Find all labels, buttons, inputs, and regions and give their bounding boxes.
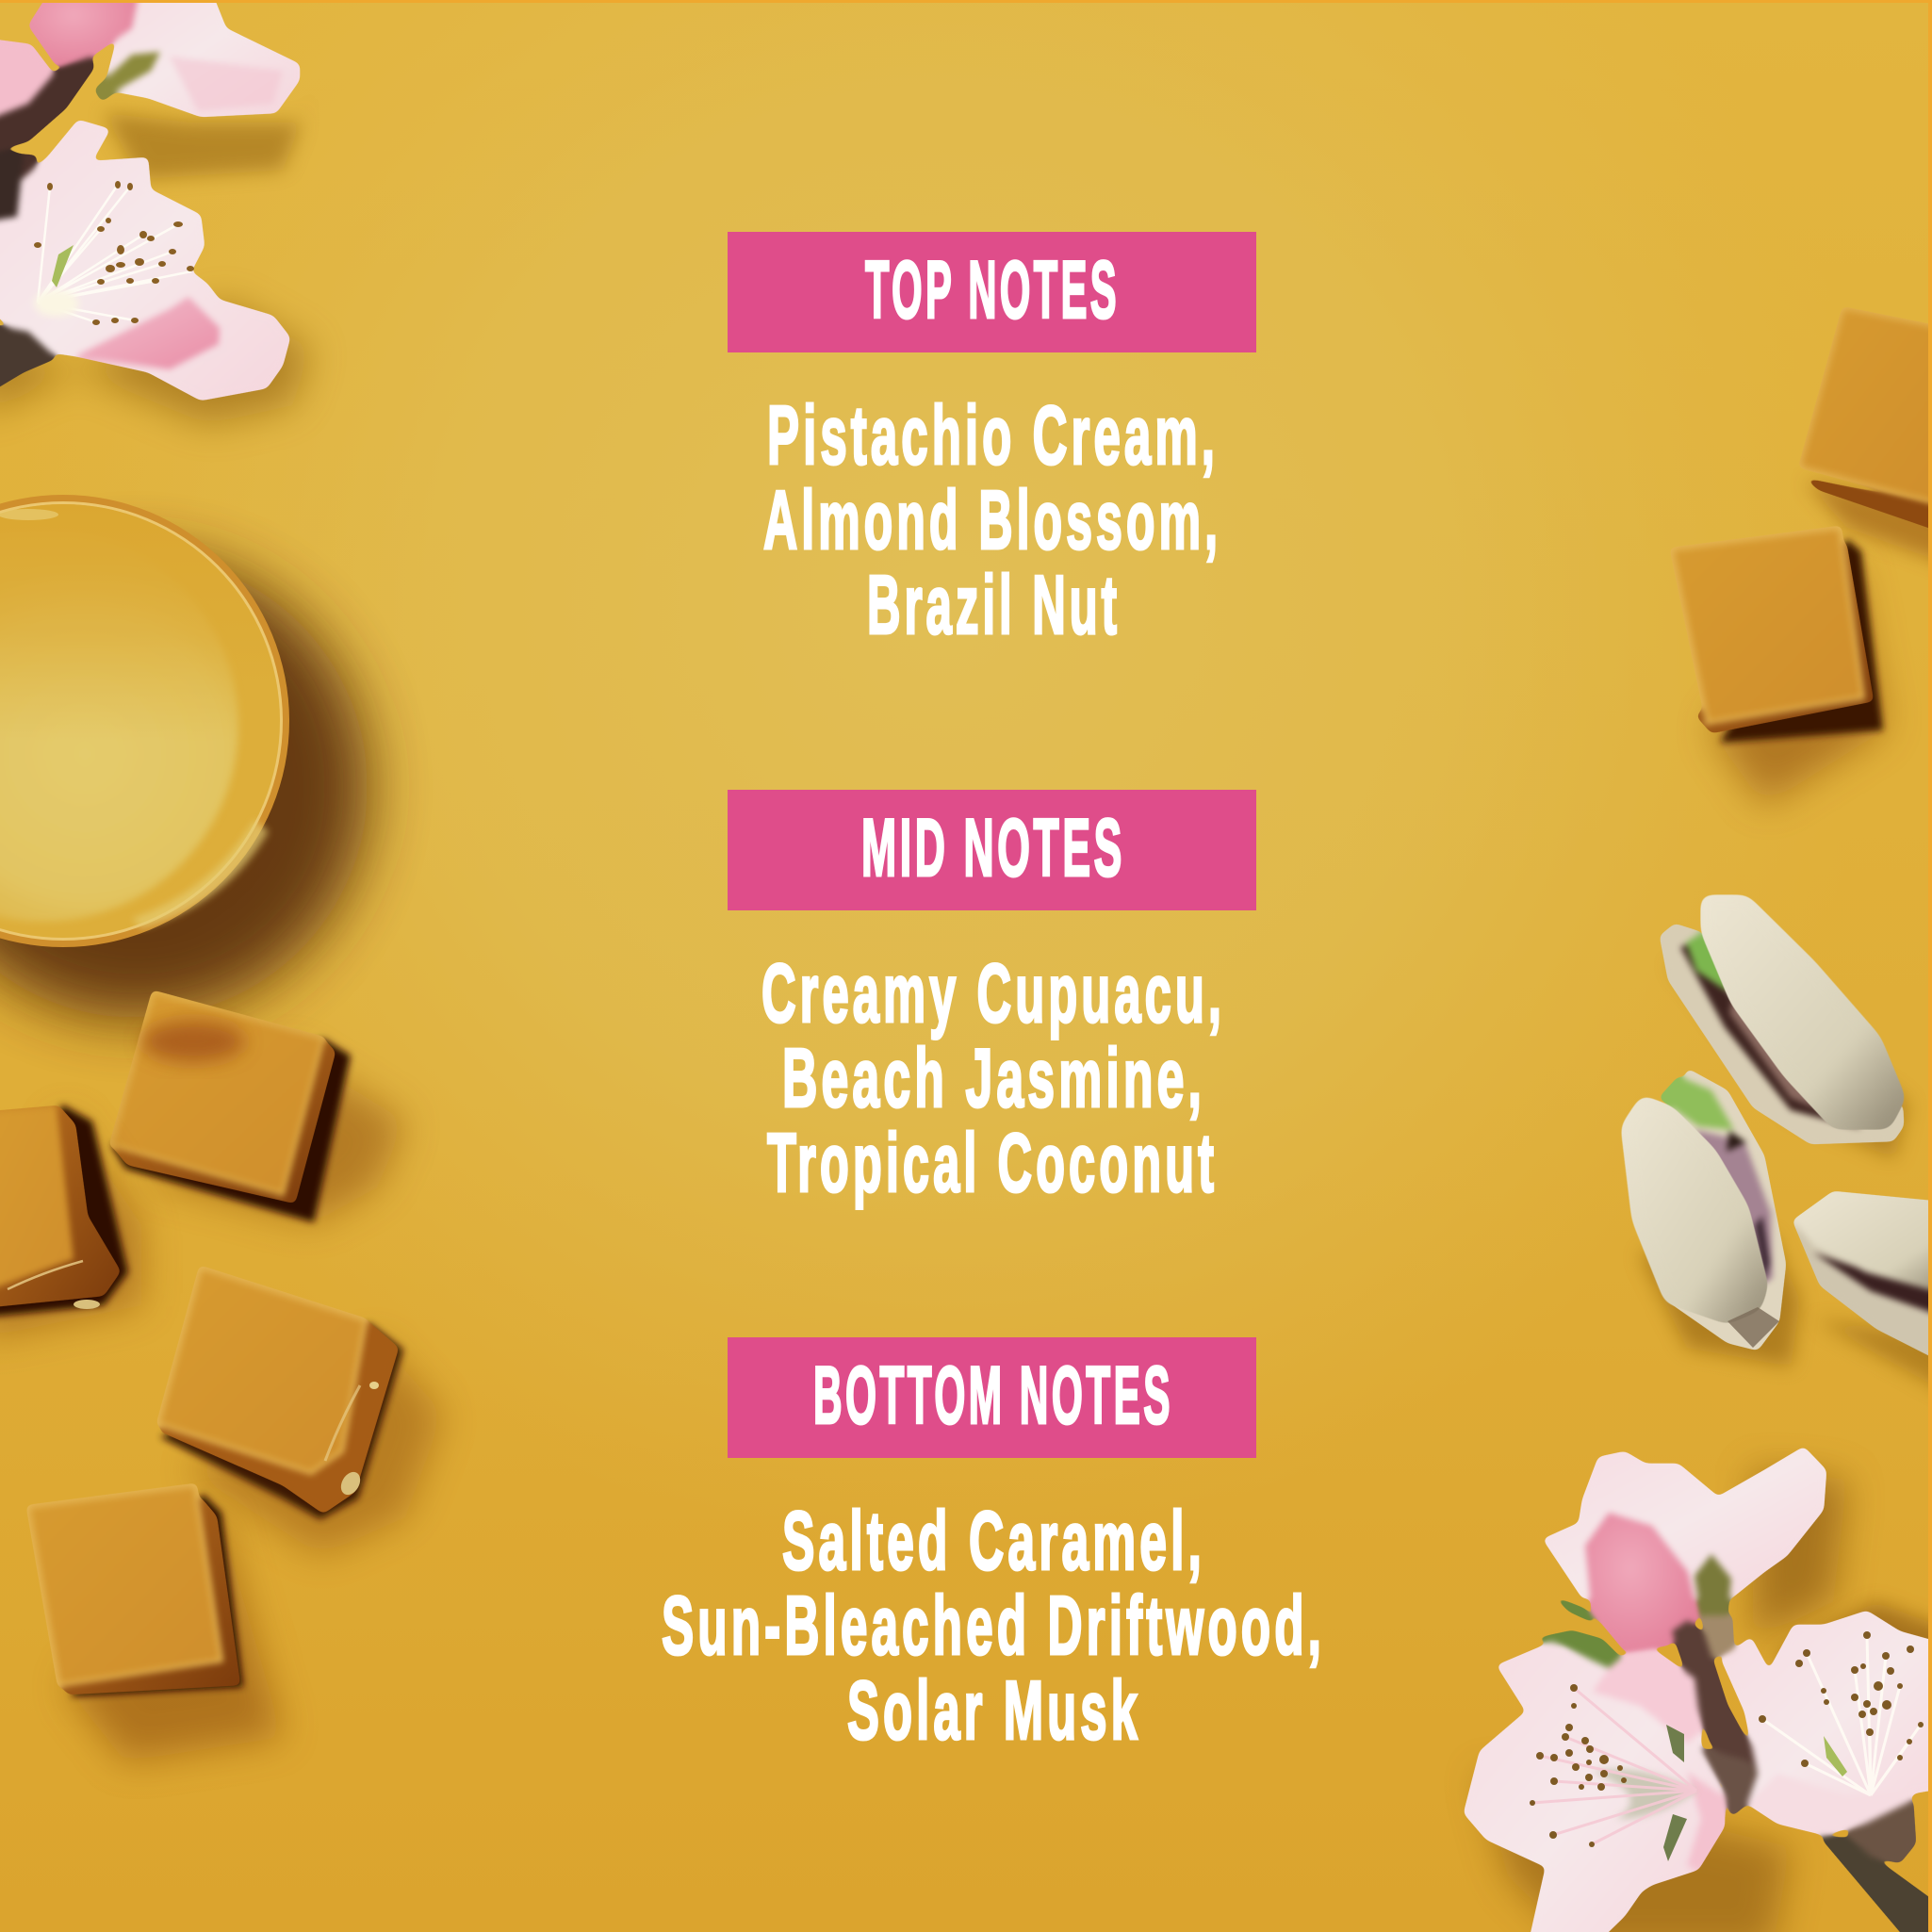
text: bottom notes list: Salted Caramel, — [782, 1494, 1205, 1587]
stamens — [1762, 1635, 1921, 1795]
text: mid notes list: Creamy Cupuacu, — [761, 946, 1225, 1040]
section: bottom notes — [662, 1337, 1325, 1757]
anthers — [1530, 1631, 1924, 1847]
text: top notes list: Brazil Nut — [867, 558, 1121, 651]
text: bottom notes list: Sun-Bleached Driftwood, — [662, 1579, 1325, 1672]
flower cluster: bottom right — [1464, 1447, 1932, 1932]
heading bar: bottom notes — [728, 1337, 1256, 1458]
blossom shapes, softened — [0, 0, 300, 401]
heading bar: bottom notes: BOTTOM NOTES — [813, 1351, 1173, 1441]
white half shell — [1701, 895, 1906, 1129]
anthers — [34, 181, 194, 325]
white half shell — [1621, 1095, 1768, 1324]
flower throat — [1593, 1770, 1696, 1819]
flower cluster: top left — [0, 0, 316, 424]
text: bottom notes list: Solar Musk — [847, 1663, 1141, 1757]
text: mid notes list: Tropical Coconut — [767, 1116, 1218, 1209]
text: mid notes list — [761, 946, 1225, 1209]
heading bar: mid notes — [728, 790, 1256, 910]
heading bar: top notes: TOP NOTES — [865, 245, 1120, 336]
caramel cube: upper middle — [111, 992, 405, 1222]
caramel cube: middle right — [1672, 528, 1885, 806]
pistachio: upper — [1660, 895, 1908, 1159]
plate with shadow — [0, 495, 368, 1018]
text: mid notes list: Beach Jasmine, — [782, 1031, 1205, 1124]
pistachio: right edge — [1793, 1191, 1932, 1395]
heading bar: mid notes: MID NOTES — [861, 803, 1125, 893]
caramel cube: lower left — [28, 1485, 283, 1761]
section: mid notes — [728, 790, 1256, 1209]
text: top notes list: Pistachio Cream, — [767, 388, 1219, 482]
caramel cube: left edge — [0, 1105, 141, 1338]
caramel cube: upper right — [1800, 308, 1932, 565]
text: top notes list — [763, 388, 1221, 651]
stamens — [38, 185, 191, 322]
heading bar: top notes — [728, 232, 1256, 352]
caramel cube: centre left — [158, 1268, 443, 1555]
text: top notes list: Almond Blossom, — [763, 473, 1221, 566]
shell and kernel — [1660, 924, 1904, 1144]
blossom shapes, softened — [1464, 1447, 1932, 1932]
shell with kernel — [1659, 1069, 1786, 1351]
section: top notes — [728, 232, 1256, 651]
text: bottom notes list — [662, 1494, 1325, 1757]
pistachio: lower — [1621, 1069, 1800, 1367]
